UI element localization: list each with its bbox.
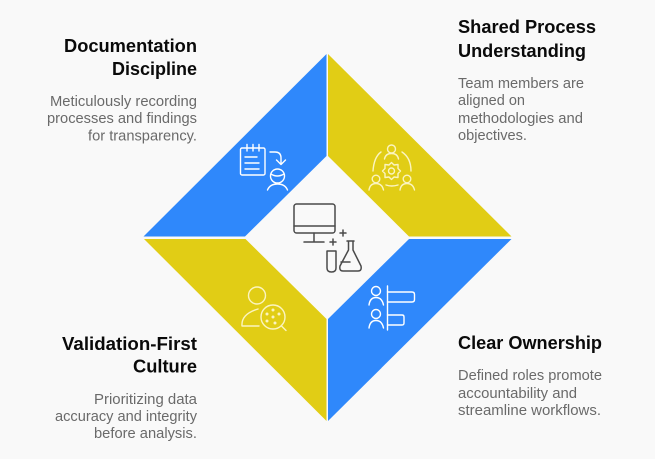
heading: Validation-First Culture <box>62 334 197 376</box>
body: Validation-First Culture: before analysis. <box>94 426 197 442</box>
icon: computer, test tube and flask <box>294 204 361 272</box>
heading: Documentation Discipline <box>64 36 197 79</box>
icon: team around gear <box>369 145 414 190</box>
body: Shared Process Understanding: Team members are <box>458 76 584 92</box>
heading: Documentation Discipline: Documentation <box>64 36 197 56</box>
heading: Shared Process Understanding: Understanding <box>458 41 586 61</box>
panel: blue bottom-right segment <box>328 239 512 421</box>
body: Shared Process Understanding: methodologies and <box>458 111 583 127</box>
icon: document with arrow and person <box>240 144 288 190</box>
body: Documentation Discipline: processes and findings <box>47 111 197 127</box>
body: Clear Ownership: accountability and <box>458 386 577 402</box>
body: Documentation Discipline: Meticulously recording <box>50 94 197 110</box>
text: Clear Ownership <box>458 333 602 419</box>
body: Clear Ownership: Defined roles promote <box>458 368 602 384</box>
body: Shared Process Understanding: aligned on <box>458 93 525 109</box>
heading: Validation-First Culture: Validation-First <box>62 334 197 354</box>
body: Validation-First Culture <box>55 392 198 442</box>
body: Validation-First Culture: accuracy and integrity <box>55 409 198 425</box>
body: Clear Ownership: streamline workflows. <box>458 403 601 419</box>
panel: blue top-left segment <box>144 54 326 236</box>
body: Documentation Discipline <box>47 94 197 144</box>
heading: Clear Ownership: Clear Ownership <box>458 333 602 353</box>
icon: people with flags <box>369 286 414 330</box>
text: Validation-First Culture <box>55 334 198 442</box>
heading: Documentation Discipline: Discipline <box>112 59 197 79</box>
body: Validation-First Culture: Prioritizing data <box>94 392 198 408</box>
heading: Validation-First Culture: Culture <box>133 356 197 376</box>
body: Shared Process Understanding <box>458 76 584 144</box>
heading: Shared Process Understanding: Shared Process <box>458 17 596 37</box>
body: Shared Process Understanding: objectives. <box>458 128 527 144</box>
icon: person with magnifier <box>242 287 286 330</box>
panel: yellow bottom-left segment <box>144 239 326 421</box>
heading: Shared Process Understanding <box>458 17 596 61</box>
text: Shared Process Understanding <box>458 17 596 144</box>
panel: yellow top-right segment <box>328 54 512 236</box>
body: Clear Ownership <box>458 368 602 419</box>
body: Documentation Discipline: for transparency. <box>88 128 197 144</box>
text: Documentation Discipline <box>47 36 197 144</box>
